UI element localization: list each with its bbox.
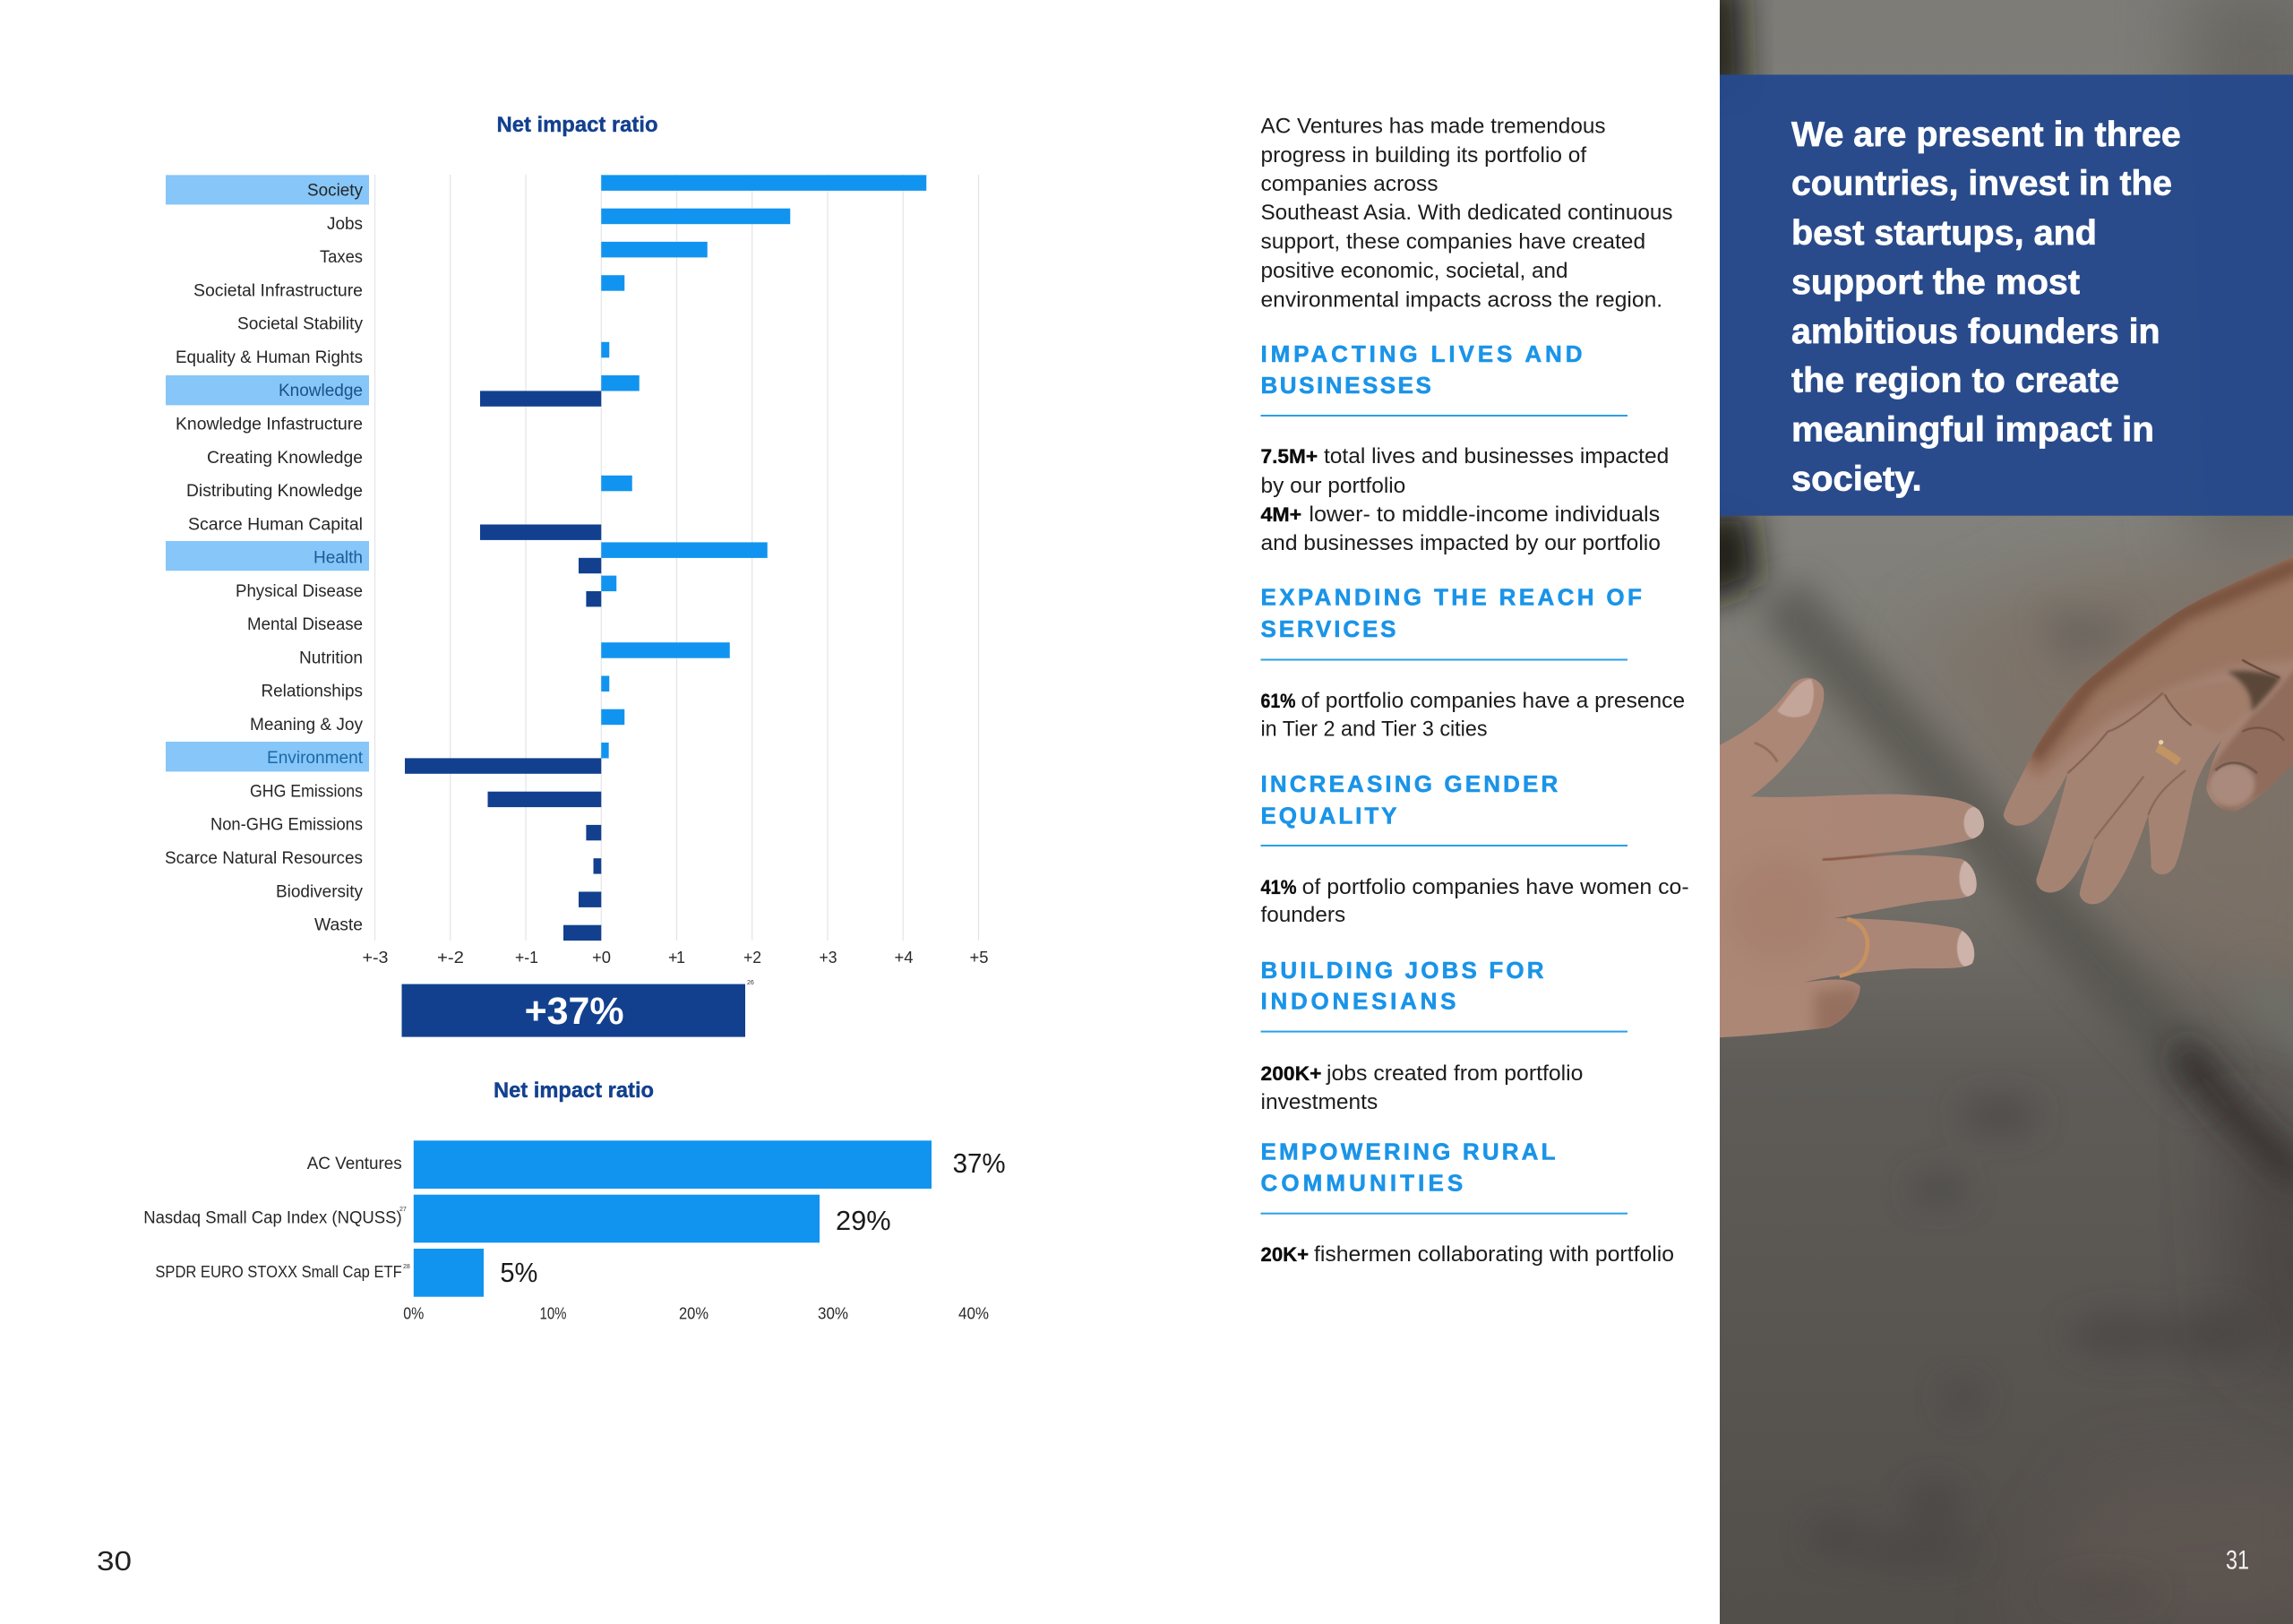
row labels: Meaning & Joy xyxy=(250,716,363,735)
axis tick labels: +3 xyxy=(819,949,837,967)
page number 30: 30 xyxy=(97,1545,132,1577)
section: increasing gender equality: EQUALITY xyxy=(1261,803,1397,829)
section: impacting lives and businesses: 4M+ xyxy=(1261,503,1301,526)
category highlight bands xyxy=(166,175,369,771)
bar: Nasdaq 29%: Nasdaq Small Cap Index (NQUSS) xyxy=(143,1209,402,1228)
row labels: Knowledge Infastructure xyxy=(176,416,363,434)
bar: SPDR 5%: 28 xyxy=(403,1264,410,1270)
text block: intro paragraph: companies across xyxy=(1261,172,1438,196)
row labels: GHG Emissions xyxy=(250,783,363,801)
row labels: Scarce Natural Resources xyxy=(165,849,363,868)
right hand xyxy=(1995,549,2293,914)
section: increasing gender equality: 41% xyxy=(1261,876,1297,898)
quote text xyxy=(1791,116,2181,499)
section: empowering rural communities: 20K+ xyxy=(1261,1243,1309,1266)
bar: SPDR 5% xyxy=(155,1249,537,1297)
row labels: Nutrition xyxy=(299,649,363,667)
ground mottling xyxy=(1937,1099,2236,1353)
section: building jobs for Indonesians: 200K+ xyxy=(1261,1062,1321,1085)
row labels: Physical Disease xyxy=(236,582,363,601)
panel: comparison bar chart xyxy=(143,1140,1006,1323)
section: expanding the reach of services: in Tier 2 and Tier 3 cities xyxy=(1261,717,1487,742)
section: expanding the reach of services: of portfolio companies have a presence xyxy=(1301,689,1685,713)
percentage axis labels: 40% xyxy=(958,1305,989,1323)
heading: net impact ratio (lower chart): Net impact ratio xyxy=(494,1078,654,1103)
panel: net impact diverging bar chart xyxy=(165,175,989,967)
bar: Nasdaq 29%: 27 xyxy=(399,1207,407,1213)
text block: intro paragraph: positive economic, societal, and xyxy=(1261,259,1567,283)
photo panel: two hands reaching xyxy=(1693,0,2293,1624)
section: building jobs for Indonesians: BUILDING JOBS FOR xyxy=(1261,957,1544,984)
row labels: Relationships xyxy=(262,683,363,701)
bar: SPDR 5%: SPDR EURO STOXX Small Cap ETF xyxy=(155,1263,402,1281)
percentage axis labels: 30% xyxy=(818,1305,848,1323)
positive bars xyxy=(601,175,926,758)
section: building jobs for Indonesians xyxy=(1261,957,1627,1114)
row labels: Non-GHG Emissions xyxy=(210,816,363,835)
axis tick labels: +-3 xyxy=(362,949,389,967)
axis tick labels: +4 xyxy=(894,949,914,967)
row labels: Distributing Knowledge xyxy=(186,482,363,501)
bar: Nasdaq 29%: 29% xyxy=(836,1205,891,1236)
percentage axis labels: 10% xyxy=(539,1305,566,1323)
section: impacting lives and businesses: by our portfolio xyxy=(1261,474,1405,498)
section: expanding the reach of services: 61% xyxy=(1261,690,1295,712)
bar: AC Ventures 37%: 37% xyxy=(953,1147,1006,1179)
quote text: best startups, and xyxy=(1791,214,2097,253)
section: building jobs for Indonesians: INDONESIANS xyxy=(1261,988,1456,1015)
quote text: support the most xyxy=(1791,263,2080,302)
section: impacting lives and businesses: and businesses impacted by our portfolio xyxy=(1261,531,1661,555)
bar: Nasdaq 29% xyxy=(143,1195,891,1242)
row labels: Scarce Human Capital xyxy=(188,515,363,534)
percentage axis labels: 20% xyxy=(679,1305,709,1323)
wedding ring left xyxy=(1840,919,1868,975)
section: impacting lives and businesses: 7.5M+ xyxy=(1261,445,1318,468)
axis tick labels: +0 xyxy=(592,949,611,967)
text block: intro paragraph: support, these companies have created xyxy=(1261,229,1645,253)
axis tick labels: +-2 xyxy=(437,949,464,967)
row labels: Mental Disease xyxy=(247,615,363,634)
text block: intro paragraph: AC Ventures has made tremendous xyxy=(1261,115,1605,138)
quote text: the region to create xyxy=(1791,362,2119,400)
row labels: Societal Stability xyxy=(237,315,363,334)
row labels: Waste xyxy=(314,915,363,935)
quote text: countries, invest in the xyxy=(1791,165,2172,202)
section: increasing gender equality: founders xyxy=(1261,903,1345,927)
quote text: society. xyxy=(1791,460,1922,499)
section: empowering rural communities: COMMUNITIES xyxy=(1261,1169,1463,1196)
axis tick labels xyxy=(362,949,989,967)
section: impacting lives and businesses xyxy=(1261,340,1669,555)
row labels: Society xyxy=(307,182,363,201)
left hand xyxy=(1720,677,1984,1037)
section: impacting lives and businesses: total lives and businesses impacted xyxy=(1324,444,1669,468)
section: empowering rural communities: EMPOWERING RURAL xyxy=(1261,1138,1556,1164)
quote text: We are present in three xyxy=(1791,116,2181,154)
callout: +37% result: +37% xyxy=(525,990,624,1033)
text block: intro paragraph: Southeast Asia. With dedicated continuous xyxy=(1261,201,1673,225)
row labels: Environment xyxy=(267,749,364,768)
axis tick labels: +2 xyxy=(743,949,761,967)
heading: net impact ratio (upper chart): Net impact ratio xyxy=(496,113,657,137)
text block: intro paragraph xyxy=(1261,115,1673,312)
axis tick labels: +1 xyxy=(668,949,685,967)
row labels: Biodiversity xyxy=(276,882,363,901)
row labels: Health xyxy=(313,549,363,568)
section: impacting lives and businesses: IMPACTING LIVES AND xyxy=(1261,340,1582,367)
row labels: Taxes xyxy=(320,248,363,267)
section: building jobs for Indonesians: jobs created from portfolio xyxy=(1326,1061,1583,1086)
wedding ring right xyxy=(2157,748,2179,762)
section: empowering rural communities xyxy=(1261,1138,1674,1267)
blue quote band xyxy=(1720,74,2293,516)
axis tick labels: +5 xyxy=(969,949,989,967)
text block: intro paragraph: progress in building its portfolio of xyxy=(1261,143,1586,168)
quote text: meaningful impact in xyxy=(1791,411,2154,450)
page number 31: 31 xyxy=(2226,1546,2249,1576)
row labels: Jobs xyxy=(327,215,363,234)
section: expanding the reach of services xyxy=(1261,584,1685,742)
bar: AC Ventures 37% xyxy=(307,1140,1006,1189)
section: expanding the reach of services: EXPANDING THE REACH OF xyxy=(1261,584,1642,611)
row labels: Creating Knowledge xyxy=(207,449,363,468)
callout: +37% result: 26 xyxy=(747,980,754,986)
section: empowering rural communities: fishermen collaborating with portfolio xyxy=(1314,1242,1674,1267)
section: increasing gender equality xyxy=(1261,770,1689,927)
row labels: Equality & Human Rights xyxy=(176,348,363,367)
section: impacting lives and businesses: BUSINESSES xyxy=(1261,372,1431,399)
text block: intro paragraph: environmental impacts across the region. xyxy=(1261,288,1662,312)
negative bars xyxy=(405,391,601,941)
callout: +37% result xyxy=(401,980,754,1037)
percentage axis labels xyxy=(403,1305,989,1323)
section: increasing gender equality: INCREASING GENDER xyxy=(1261,770,1559,797)
section: increasing gender equality: of portfolio companies have women co- xyxy=(1302,875,1689,899)
section: expanding the reach of services: SERVICES xyxy=(1261,615,1396,642)
bar: AC Ventures 37%: AC Ventures xyxy=(307,1155,402,1173)
row labels: Knowledge xyxy=(279,382,363,400)
bar: SPDR 5%: 5% xyxy=(500,1257,537,1288)
row labels: Societal Infrastructure xyxy=(193,281,363,300)
percentage axis labels: 0% xyxy=(403,1305,424,1323)
row labels xyxy=(165,182,364,935)
section: impacting lives and businesses: lower- to middle-income individuals xyxy=(1309,503,1660,527)
axis tick labels: +-1 xyxy=(515,949,538,967)
section: building jobs for Indonesians: investments xyxy=(1261,1090,1378,1114)
quote text: ambitious founders in xyxy=(1791,313,2160,351)
